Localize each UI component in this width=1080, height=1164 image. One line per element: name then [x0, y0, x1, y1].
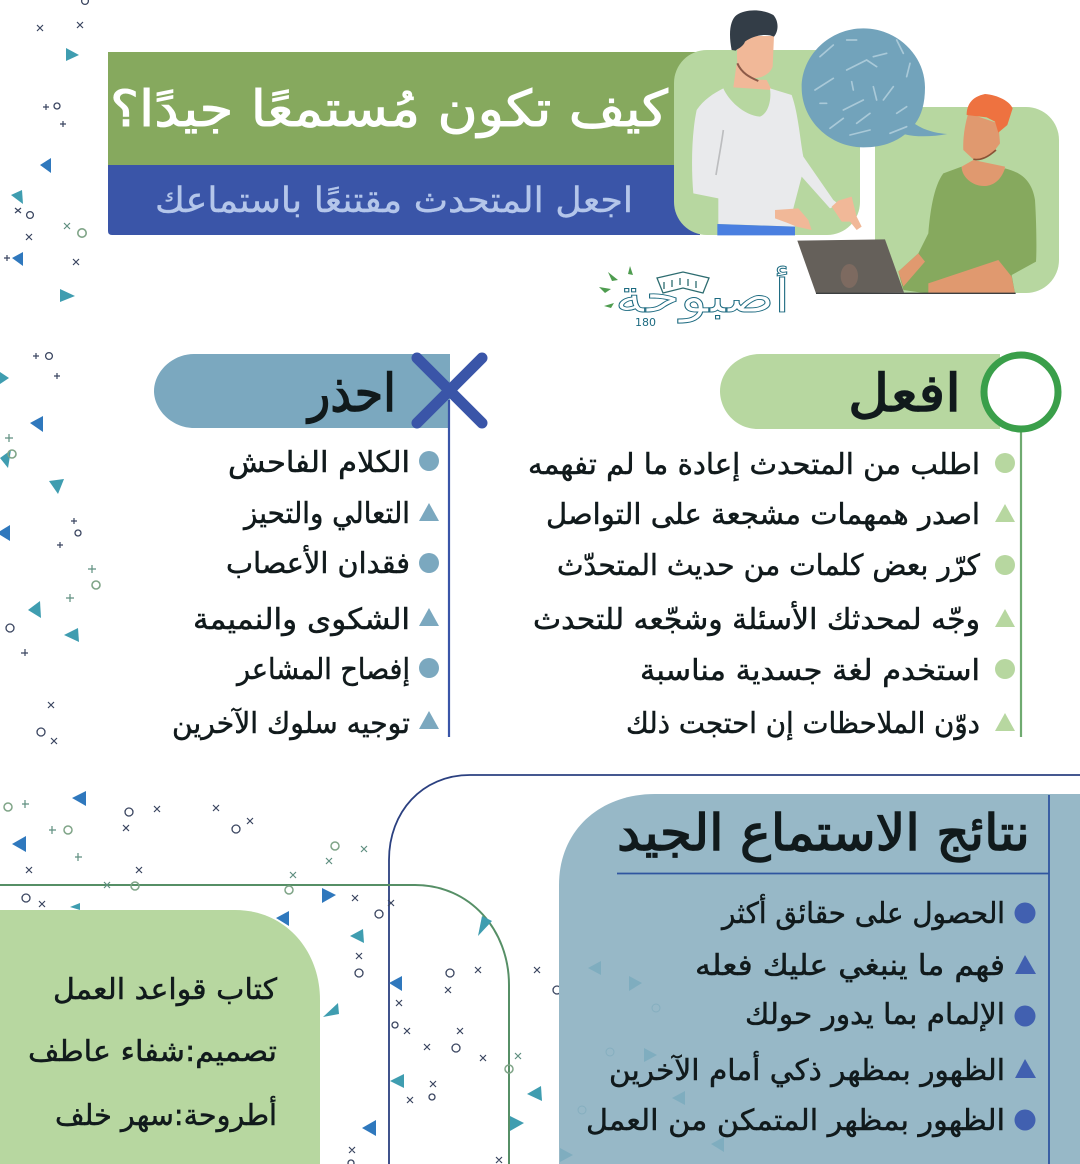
results item 2: فهم ما ينبغي عليك فعله — [695, 948, 1005, 983]
do header band — [720, 354, 1000, 429]
credits line 1: كتاب قواعد العمل — [53, 972, 277, 1006]
results item 1: الحصول على حقائق أكثر — [720, 893, 1005, 930]
subtitle text: اجعل المتحدث مقتنعًا باستماعك — [155, 181, 633, 221]
credits background — [0, 910, 320, 1164]
title panel — [108, 50, 1059, 293]
do vertical line — [1020, 430, 1022, 737]
results header and list — [586, 795, 1049, 1164]
credits line 2: تصميم:شفاء عاطف — [28, 1034, 277, 1069]
beware item 4: الشكوى والنميمة — [193, 602, 410, 636]
do item 1: اطلب من المتحدث إعادة ما لم تفهمه — [528, 447, 980, 482]
illustration card left — [674, 50, 860, 235]
beware heading: احذر — [305, 364, 396, 424]
illustration: two people talking — [692, 10, 1036, 293]
results item 3: الإلمام بما يدور حولك — [745, 997, 1005, 1032]
beware list — [172, 445, 439, 740]
decorative confetti: lower area — [0, 775, 1080, 1164]
icon: speech bubble — [802, 28, 947, 147]
panel: do — [720, 354, 1058, 737]
credits line 3: أطروحة:سهر خلف — [55, 1095, 277, 1132]
do list — [528, 447, 1015, 741]
beware item 1: الكلام الفاحش — [228, 445, 410, 479]
figure: man at laptop — [797, 94, 1036, 293]
beware item 3: فقدان الأعصاب — [226, 544, 410, 580]
icon: circle — [984, 355, 1058, 429]
do item 2: اصدر همهمات مشجعة على التواصل — [546, 497, 980, 531]
title band — [108, 52, 708, 165]
do item 3: كرّر بعض كلمات من حديث المتحدّث — [557, 548, 980, 582]
panel: beware — [154, 354, 482, 737]
decorative confetti: left strip — [0, 0, 100, 744]
do item 6: دوّن الملاحظات إن احتجت ذلك — [626, 706, 980, 741]
subtitle band — [108, 165, 700, 235]
beware item 5: إفصاح المشاعر — [235, 652, 410, 687]
beware header band — [154, 354, 450, 428]
figure: man in white shirt — [692, 10, 862, 235]
title text: كيف تكون مُستمعًا جيدًا؟ — [110, 80, 668, 138]
results item 5: الظهور بمظهر المتمكن من العمل — [586, 1103, 1005, 1137]
do bullets — [995, 453, 1015, 731]
logo book — [657, 272, 709, 293]
beware item 2: التعالي والتحيز — [242, 496, 410, 531]
beware bullets — [419, 451, 439, 729]
illustration card right — [875, 107, 1059, 293]
logo number: 180 — [635, 316, 656, 329]
do item 5: استخدم لغة جسدية مناسبة — [640, 653, 980, 687]
results bullets — [1014, 902, 1036, 1130]
results heading: نتائج الاستماع الجيد — [617, 804, 1030, 863]
do heading: افعل — [848, 364, 961, 424]
logo: أصبوحة 180: أصبوحة — [615, 266, 790, 324]
results rules — [617, 795, 1049, 1164]
do item 4: وجّه لمحدثك الأسئلة وشجّعه للتحدث — [533, 600, 980, 636]
results item 4: الظهور بمظهر ذكي أمام الآخرين — [609, 1050, 1005, 1088]
logo leaves — [599, 266, 633, 308]
panel: credits — [0, 910, 320, 1164]
icon: X — [417, 358, 482, 423]
beware item 6: توجيه سلوك الآخرين — [172, 706, 410, 740]
beware vertical line — [448, 400, 450, 737]
panel: results of good listening background — [559, 794, 1080, 1164]
logo: أصبوحة 180 — [599, 266, 790, 329]
faded confetti on results panel — [560, 961, 724, 1162]
